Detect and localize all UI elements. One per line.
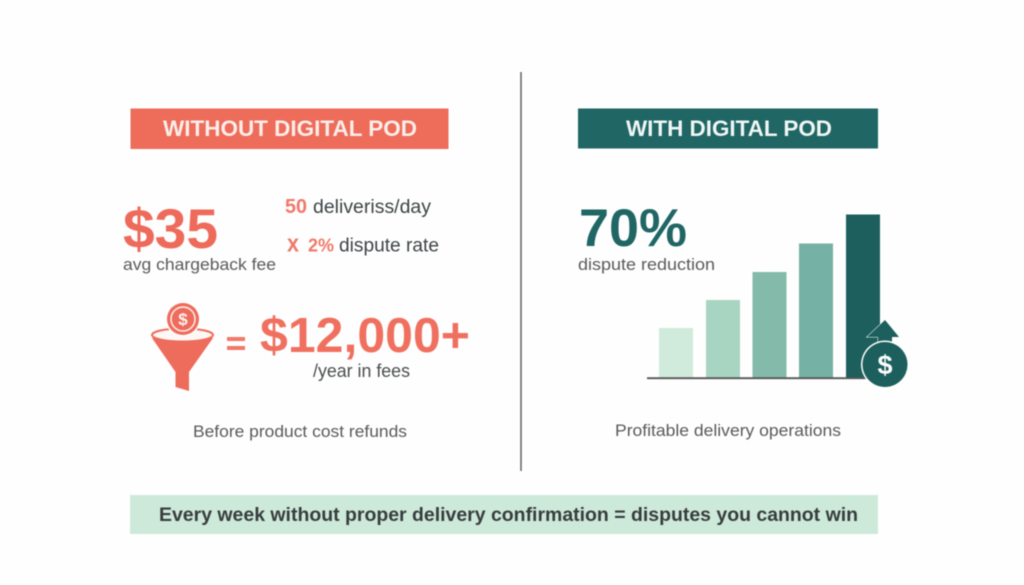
stat: $12,000+ per year: $12,000+ xyxy=(260,309,470,363)
caption: profitable delivery operations: Profitable delivery operations xyxy=(615,421,841,440)
stat: deliveries per day: 50 xyxy=(285,196,307,218)
callout: bottom banner: Every week without proper delivery confirmation = disputes you cannot win xyxy=(159,504,858,526)
stat: dispute rate xyxy=(287,230,439,258)
stat: dispute rate: x xyxy=(287,230,300,258)
icon: funnel with dollar coin xyxy=(152,302,213,391)
stat: $12,000+ per year: /year in fees xyxy=(313,361,410,381)
stat: dispute rate: 2% xyxy=(308,234,334,256)
panel: with digital pod xyxy=(578,108,909,440)
heading: without digital pod: WITHOUT DIGITAL POD xyxy=(163,116,417,141)
stat: 70% dispute reduction: dispute reduction xyxy=(578,255,715,274)
bar chart: rising profitability xyxy=(647,214,880,378)
stat: $35 chargeback fee xyxy=(123,197,276,274)
stat: dispute rate: dispute rate xyxy=(339,236,439,256)
panel: without digital pod xyxy=(123,108,470,441)
stat: $35 chargeback fee: avg chargeback fee xyxy=(123,255,276,274)
icon: equals sign xyxy=(227,337,245,350)
callout: bottom banner xyxy=(130,495,878,534)
stat: 70% dispute reduction: 70% xyxy=(579,199,687,258)
heading: with digital pod: WITH DIGITAL POD xyxy=(626,116,832,141)
stat: 70% dispute reduction xyxy=(578,199,715,274)
icon: dollar coin with up arrow xyxy=(861,320,909,388)
heading: with digital pod xyxy=(578,108,878,148)
stat: $35 chargeback fee: $35 xyxy=(123,197,218,260)
caption: before product cost refunds: Before product cost refunds xyxy=(193,422,407,441)
heading: without digital pod xyxy=(130,108,448,149)
stat: deliveries per day: deliveriss/day xyxy=(313,197,432,218)
icon: funnel with dollar coin: $ xyxy=(178,310,188,329)
icon: dollar coin with up arrow: $ xyxy=(877,350,893,380)
